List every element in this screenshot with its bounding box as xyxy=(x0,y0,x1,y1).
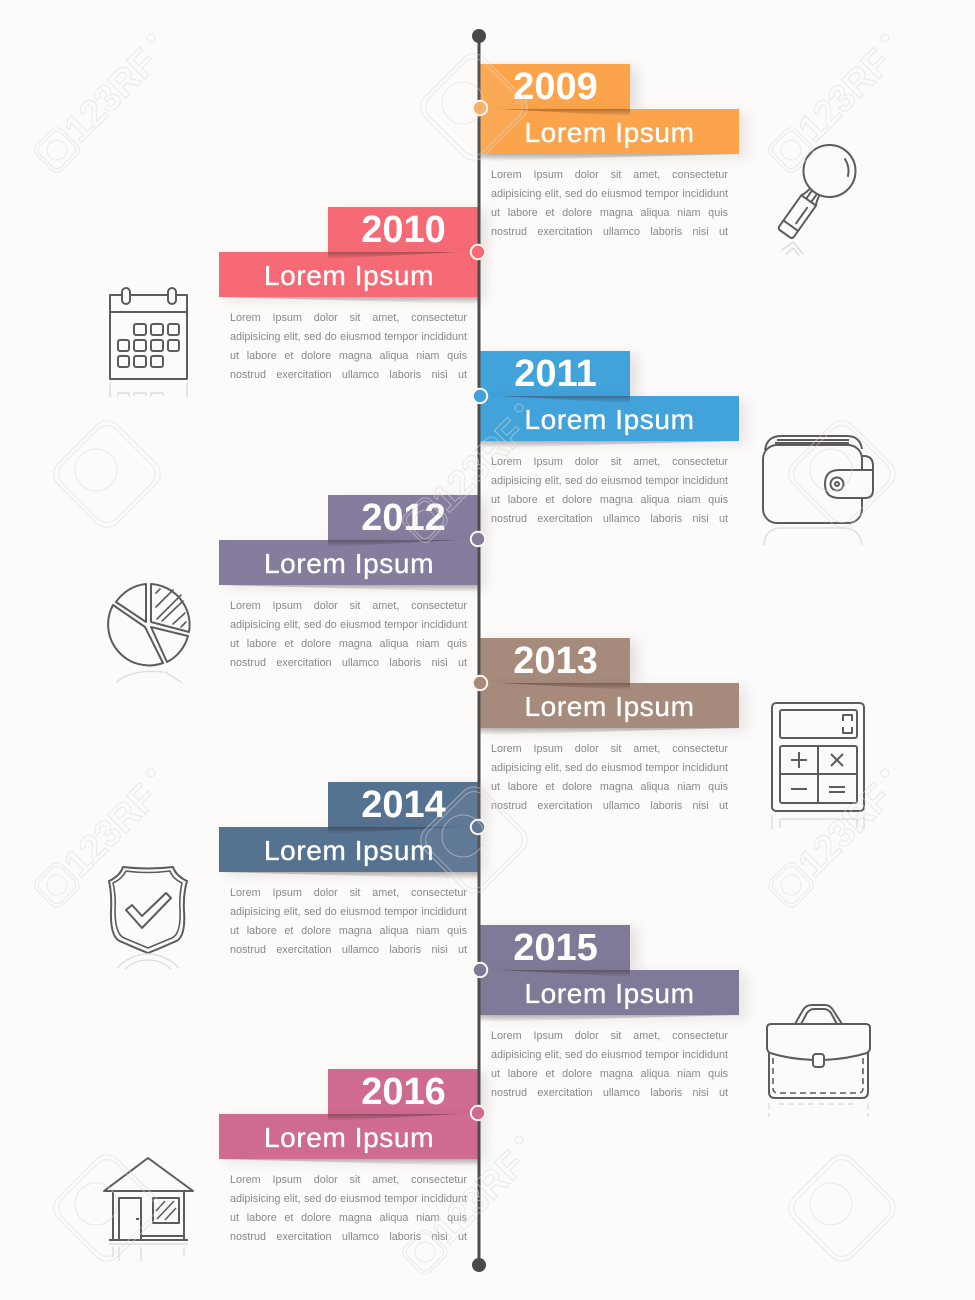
year label 2009: 2009 xyxy=(513,66,598,108)
panel: 2014 xyxy=(219,782,490,956)
text block 2013: nostrud exercitation ullamco laboris nisi ut xyxy=(491,800,728,812)
text block 2012: Lorem Ipsum dolor sit amet, consectetur xyxy=(230,600,467,612)
text block 2011: adipisicing elit, sed do eiusmod tempor incididunt xyxy=(491,475,728,487)
panel: 2015 xyxy=(480,924,749,1099)
ribbon heading 2016 xyxy=(219,1114,479,1159)
icon: magnifying glass xyxy=(778,145,856,255)
year label 2015: 2015 xyxy=(513,927,598,969)
text block 2016: ut labore et dolore magna aliqua niam quis xyxy=(230,1212,467,1224)
panel: 2011 xyxy=(480,350,749,525)
text block 2016: nostrud exercitation ullamco laboris nisi ut xyxy=(230,1231,467,1243)
text block 2016 xyxy=(230,1174,467,1243)
ribbon heading 2016: Lorem Ipsum xyxy=(264,1122,434,1153)
year label 2013: 2013 xyxy=(513,640,598,682)
ribbon heading 2012: Lorem Ipsum xyxy=(264,548,434,579)
text block 2015: adipisicing elit, sed do eiusmod tempor incididunt xyxy=(491,1049,728,1061)
year label 2016: 2016 xyxy=(361,1071,446,1113)
text block 2014 xyxy=(230,887,467,956)
text block 2010: Lorem Ipsum dolor sit amet, consectetur xyxy=(230,312,467,324)
text block 2010 xyxy=(230,312,467,381)
year label 2012: 2012 xyxy=(361,497,446,539)
year label 2011 xyxy=(479,351,630,396)
year label 2013 xyxy=(479,638,630,683)
year label 2012 xyxy=(328,495,479,540)
watermarks: 123RF xyxy=(791,776,900,885)
text block 2009: ut labore et dolore magna aliqua niam quis xyxy=(491,207,728,219)
timeline axis xyxy=(472,29,486,1272)
watermarks: 123RF xyxy=(57,776,166,885)
text block 2011: ut labore et dolore magna aliqua niam quis xyxy=(491,494,728,506)
text block 2011: Lorem Ipsum dolor sit amet, consectetur xyxy=(491,456,728,468)
text block 2016: Lorem Ipsum dolor sit amet, consectetur xyxy=(230,1174,467,1186)
text block 2013: adipisicing elit, sed do eiusmod tempor incididunt xyxy=(491,762,728,774)
year label 2010 xyxy=(328,207,479,252)
text block 2011 xyxy=(491,456,728,525)
ribbon heading 2014 xyxy=(219,827,479,872)
ribbon heading 2013 xyxy=(479,683,739,728)
text block 2010: ut labore et dolore magna aliqua niam quis xyxy=(230,350,467,362)
icon: pie chart xyxy=(108,584,190,682)
ribbon heading 2015 xyxy=(479,970,739,1015)
panel: 2009 xyxy=(480,64,749,238)
text block 2012: adipisicing elit, sed do eiusmod tempor incididunt xyxy=(230,619,467,631)
text block 2014: adipisicing elit, sed do eiusmod tempor incididunt xyxy=(230,906,467,918)
ribbon heading 2010: Lorem Ipsum xyxy=(264,260,434,291)
year label 2014 xyxy=(328,782,479,827)
icon: wallet xyxy=(763,436,873,545)
text block 2009: Lorem Ipsum dolor sit amet, consectetur xyxy=(491,169,728,181)
year label 2009 xyxy=(479,64,630,109)
ribbon heading 2015: Lorem Ipsum xyxy=(524,978,694,1009)
text block 2013: Lorem Ipsum dolor sit amet, consectetur xyxy=(491,743,728,755)
ribbon heading 2009: Lorem Ipsum xyxy=(524,117,694,148)
icon: briefcase xyxy=(767,1005,870,1117)
text block 2012: ut labore et dolore magna aliqua niam quis xyxy=(230,638,467,650)
icon: calculator xyxy=(772,703,864,829)
watermarks: 123RF xyxy=(791,41,900,150)
watermarks: 123RF xyxy=(57,41,166,150)
text block 2009: adipisicing elit, sed do eiusmod tempor incididunt xyxy=(491,188,728,200)
panel: 2012 xyxy=(219,494,490,669)
text block 2014: Lorem Ipsum dolor sit amet, consectetur xyxy=(230,887,467,899)
text block 2011: nostrud exercitation ullamco laboris nisi ut xyxy=(491,513,728,525)
text block 2013 xyxy=(491,743,728,812)
panel: 2013 xyxy=(480,638,749,812)
ribbon heading 2012 xyxy=(219,540,479,585)
panel: 2010 xyxy=(219,206,490,381)
text block 2015: ut labore et dolore magna aliqua niam quis xyxy=(491,1068,728,1080)
text block 2013: ut labore et dolore magna aliqua niam quis xyxy=(491,781,728,793)
text block 2014: ut labore et dolore magna aliqua niam quis xyxy=(230,925,467,937)
watermarks: 123RF xyxy=(425,1143,534,1252)
text block 2014: nostrud exercitation ullamco laboris nisi ut xyxy=(230,944,467,956)
text block 2010: adipisicing elit, sed do eiusmod tempor incididunt xyxy=(230,331,467,343)
ribbon heading 2011: Lorem Ipsum xyxy=(524,404,694,435)
timeline markers xyxy=(471,101,487,1120)
ribbon heading 2013: Lorem Ipsum xyxy=(524,691,694,722)
text block 2009: nostrud exercitation ullamco laboris nisi ut xyxy=(491,226,728,238)
text block 2016: adipisicing elit, sed do eiusmod tempor incididunt xyxy=(230,1193,467,1205)
ribbon heading 2009 xyxy=(479,109,739,154)
year label 2010: 2010 xyxy=(361,209,446,251)
icon: house xyxy=(104,1158,193,1261)
ribbon heading 2014: Lorem Ipsum xyxy=(264,835,434,866)
icon: calendar xyxy=(110,288,187,397)
text block 2015: Lorem Ipsum dolor sit amet, consectetur xyxy=(491,1030,728,1042)
text block 2009 xyxy=(491,169,728,238)
text block 2010: nostrud exercitation ullamco laboris nisi ut xyxy=(230,369,467,381)
ribbon heading 2010 xyxy=(219,252,479,297)
text block 2015 xyxy=(491,1030,728,1099)
year label 2011: 2011 xyxy=(514,353,597,395)
text block 2012 xyxy=(230,600,467,669)
year label 2014: 2014 xyxy=(361,784,446,826)
text block 2015: nostrud exercitation ullamco laboris nisi ut xyxy=(491,1087,728,1099)
icon: shield with check xyxy=(109,867,187,969)
watermarks: 123RF xyxy=(425,411,534,520)
panel: 2016 xyxy=(219,1068,490,1243)
year label 2016 xyxy=(328,1069,479,1114)
ribbon heading 2011 xyxy=(479,396,739,441)
text block 2012: nostrud exercitation ullamco laboris nisi ut xyxy=(230,657,467,669)
year label 2015 xyxy=(479,925,630,970)
